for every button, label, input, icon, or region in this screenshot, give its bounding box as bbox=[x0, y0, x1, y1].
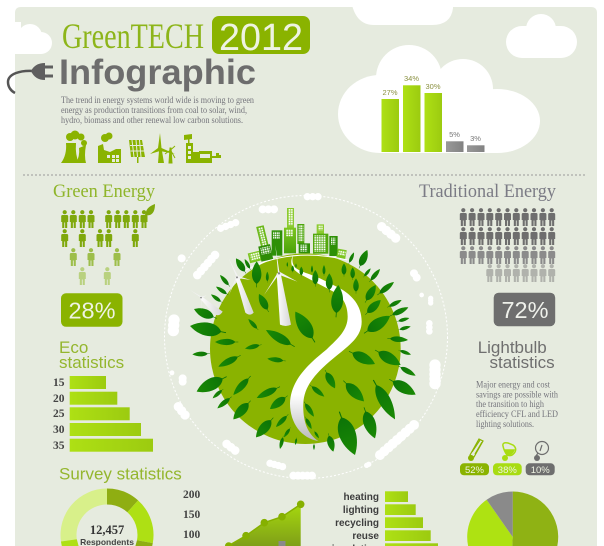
axis labels: 150 bbox=[183, 509, 200, 521]
icon: incandescent bulb bbox=[534, 442, 548, 461]
heading: Infographic: Infographic bbox=[59, 53, 256, 92]
icon: wind turbines bbox=[150, 133, 175, 163]
lightbulb text: lighting solutions. bbox=[476, 420, 534, 430]
bar chart: eco statistics bbox=[53, 376, 153, 452]
bar labels bbox=[382, 74, 481, 143]
icon: solar panel bbox=[129, 140, 145, 163]
badges: bulb percentages: 10% bbox=[531, 465, 550, 476]
pie chart bbox=[467, 492, 558, 546]
area chart bbox=[225, 500, 305, 546]
wind turbines bbox=[190, 245, 297, 326]
heading: Green Energy: Green Energy bbox=[53, 181, 155, 202]
badge: 28% bbox=[61, 293, 122, 327]
icon: biomass plant bbox=[184, 134, 221, 163]
lightbulb text: the transition to high bbox=[476, 400, 544, 410]
bar labels: 34% bbox=[404, 74, 419, 83]
lightbulb text: efficiency CFL and LED bbox=[476, 409, 558, 420]
icon: leaf bbox=[141, 204, 155, 221]
lightbulb text bbox=[476, 381, 558, 430]
heading: Eco statistics bbox=[59, 338, 124, 372]
bar chart: eco statistics: 35 bbox=[53, 440, 65, 452]
city skyline bbox=[248, 208, 347, 263]
horizon line bbox=[246, 255, 347, 270]
intro text bbox=[61, 96, 254, 126]
axis labels: 100 bbox=[183, 529, 200, 541]
people: green energy bbox=[61, 204, 155, 285]
cloud bar chart bbox=[338, 45, 540, 153]
title: GreenTECH: GreenTECH bbox=[62, 16, 204, 56]
people: traditional energy bbox=[460, 208, 555, 282]
lightbulb text: savings are possible with bbox=[476, 390, 558, 400]
icon: cooling towers bbox=[61, 130, 87, 163]
bar chart: categories bbox=[332, 491, 438, 546]
cloud: top left bbox=[15, 22, 52, 54]
donut chart: respondents: 12,457 bbox=[90, 523, 124, 537]
cloud: top right bbox=[506, 14, 577, 58]
heading: Lightbulb statistics bbox=[478, 338, 555, 372]
cloud shape bbox=[338, 45, 540, 153]
bars bbox=[382, 85, 484, 152]
badges: bulb percentages: 52% bbox=[465, 465, 485, 476]
bar chart: eco statistics: 15 bbox=[53, 377, 65, 389]
bar chart: eco statistics: 25 bbox=[53, 408, 65, 420]
bar chart: categories: recycling bbox=[335, 518, 379, 529]
bar chart: categories: heating bbox=[343, 492, 379, 503]
intro text: energy as production transitions from coal to solar, wind, bbox=[61, 105, 247, 116]
badge: 72% bbox=[494, 293, 555, 326]
icon: CFL bulb bbox=[468, 439, 483, 461]
badge: 2012: 2012 bbox=[219, 17, 303, 59]
heading: Eco statistics: Eco bbox=[59, 338, 88, 357]
bar chart: eco statistics: 30 bbox=[53, 424, 65, 436]
intro text: The trend in energy systems world wide is moving to green bbox=[61, 96, 254, 106]
planet bbox=[210, 253, 401, 444]
bar chart: categories: reuse bbox=[352, 531, 379, 542]
bar labels: 3% bbox=[470, 134, 481, 143]
heading: Lightbulb statistics: statistics bbox=[490, 353, 555, 372]
heading: Eco statistics: statistics bbox=[59, 353, 124, 372]
intro text: hydro, biomass and other renewal low carbon solutions. bbox=[61, 116, 243, 126]
trees and leaves bbox=[189, 248, 418, 458]
bar labels: 30% bbox=[425, 82, 441, 91]
icon: factory bbox=[98, 132, 121, 163]
badge: 28%: 28% bbox=[68, 298, 116, 324]
ring clouds bbox=[172, 197, 435, 476]
axis labels: 200 bbox=[183, 489, 200, 501]
icon row: energy sources bbox=[61, 130, 221, 163]
badge: 72%: 72% bbox=[501, 297, 549, 323]
badges: bulb percentages bbox=[460, 463, 555, 476]
cloud: top centre bbox=[351, 0, 453, 25]
axis labels bbox=[183, 489, 200, 541]
heading: Traditional Energy: Traditional Energy bbox=[419, 181, 556, 202]
winding road bbox=[290, 255, 362, 441]
heading: Lightbulb statistics: Lightbulb bbox=[478, 338, 547, 357]
bar labels: 5% bbox=[449, 130, 460, 139]
donut chart: respondents bbox=[60, 488, 154, 546]
bar labels: 27% bbox=[382, 88, 398, 97]
globe illustration bbox=[164, 196, 448, 478]
icon: LED bulb bbox=[502, 443, 516, 461]
lightbulb text: Major energy and cost bbox=[476, 381, 550, 391]
heading: Survey statistics: Survey statistics bbox=[59, 464, 182, 484]
bar chart: eco statistics: 20 bbox=[53, 393, 65, 405]
badges: bulb percentages: 38% bbox=[498, 465, 517, 476]
bar chart: categories: lighting bbox=[343, 505, 379, 516]
icon: plug bbox=[8, 63, 53, 93]
